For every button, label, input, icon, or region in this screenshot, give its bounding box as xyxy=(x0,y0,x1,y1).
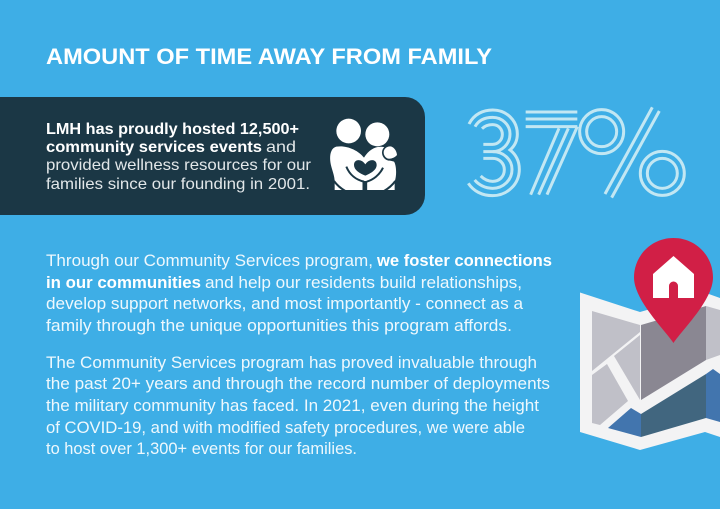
text block: community services paragraph two: to host over 1,300+ events for our families. xyxy=(46,440,357,458)
callout text: community services events xyxy=(46,139,262,156)
icon: location pin xyxy=(634,238,713,343)
callout text: and xyxy=(266,139,296,156)
callout text: LMH has proudly hosted 12,500+ xyxy=(46,121,299,138)
illustration: folded map with pin xyxy=(580,238,720,450)
text block: community services paragraph two: of COVID-19, and with modified safety procedures, we were able xyxy=(46,419,525,437)
text block: community services paragraph one: Through our Community Services program, xyxy=(46,252,373,270)
panel: community services callout xyxy=(0,97,425,215)
text block: community services paragraph two xyxy=(46,354,550,458)
text block: community services paragraph one xyxy=(46,252,552,335)
text block: community services paragraph one: we foster connections xyxy=(376,252,552,270)
panel background xyxy=(0,97,425,215)
digit 7 xyxy=(526,112,577,195)
text block: community services paragraph one: in our communities xyxy=(46,274,201,292)
text block: community services paragraph two: the military community has faced. In 2021, even during the height xyxy=(46,397,540,415)
map: water xyxy=(608,369,720,437)
callout text: provided wellness resources for our xyxy=(46,157,311,174)
text block: community services paragraph two: The Community Services program has proved invaluable through xyxy=(46,354,537,372)
map: shaded fold xyxy=(641,306,706,400)
callout text: families since our founding in 2001. xyxy=(46,176,310,193)
map: gray blocks xyxy=(592,306,720,425)
title: AMOUNT OF TIME AWAY FROM FAMILY xyxy=(46,44,492,69)
callout text xyxy=(46,121,311,193)
text block: community services paragraph one: family through the unique opportunities this program affords. xyxy=(46,317,512,335)
big number: 37% xyxy=(468,107,684,198)
text block: community services paragraph one: and help our residents build relationships, xyxy=(205,274,522,292)
percent sign xyxy=(580,107,684,198)
text block: community services paragraph two: the past 20+ years and through the record number of deployments xyxy=(46,375,550,393)
icon: family with heart xyxy=(330,119,398,191)
digit 3 xyxy=(468,110,519,196)
map sheet xyxy=(580,292,720,450)
text block: community services paragraph one: develop support networks, and most importantly - connect as a xyxy=(46,295,523,313)
icon: house xyxy=(653,256,694,298)
